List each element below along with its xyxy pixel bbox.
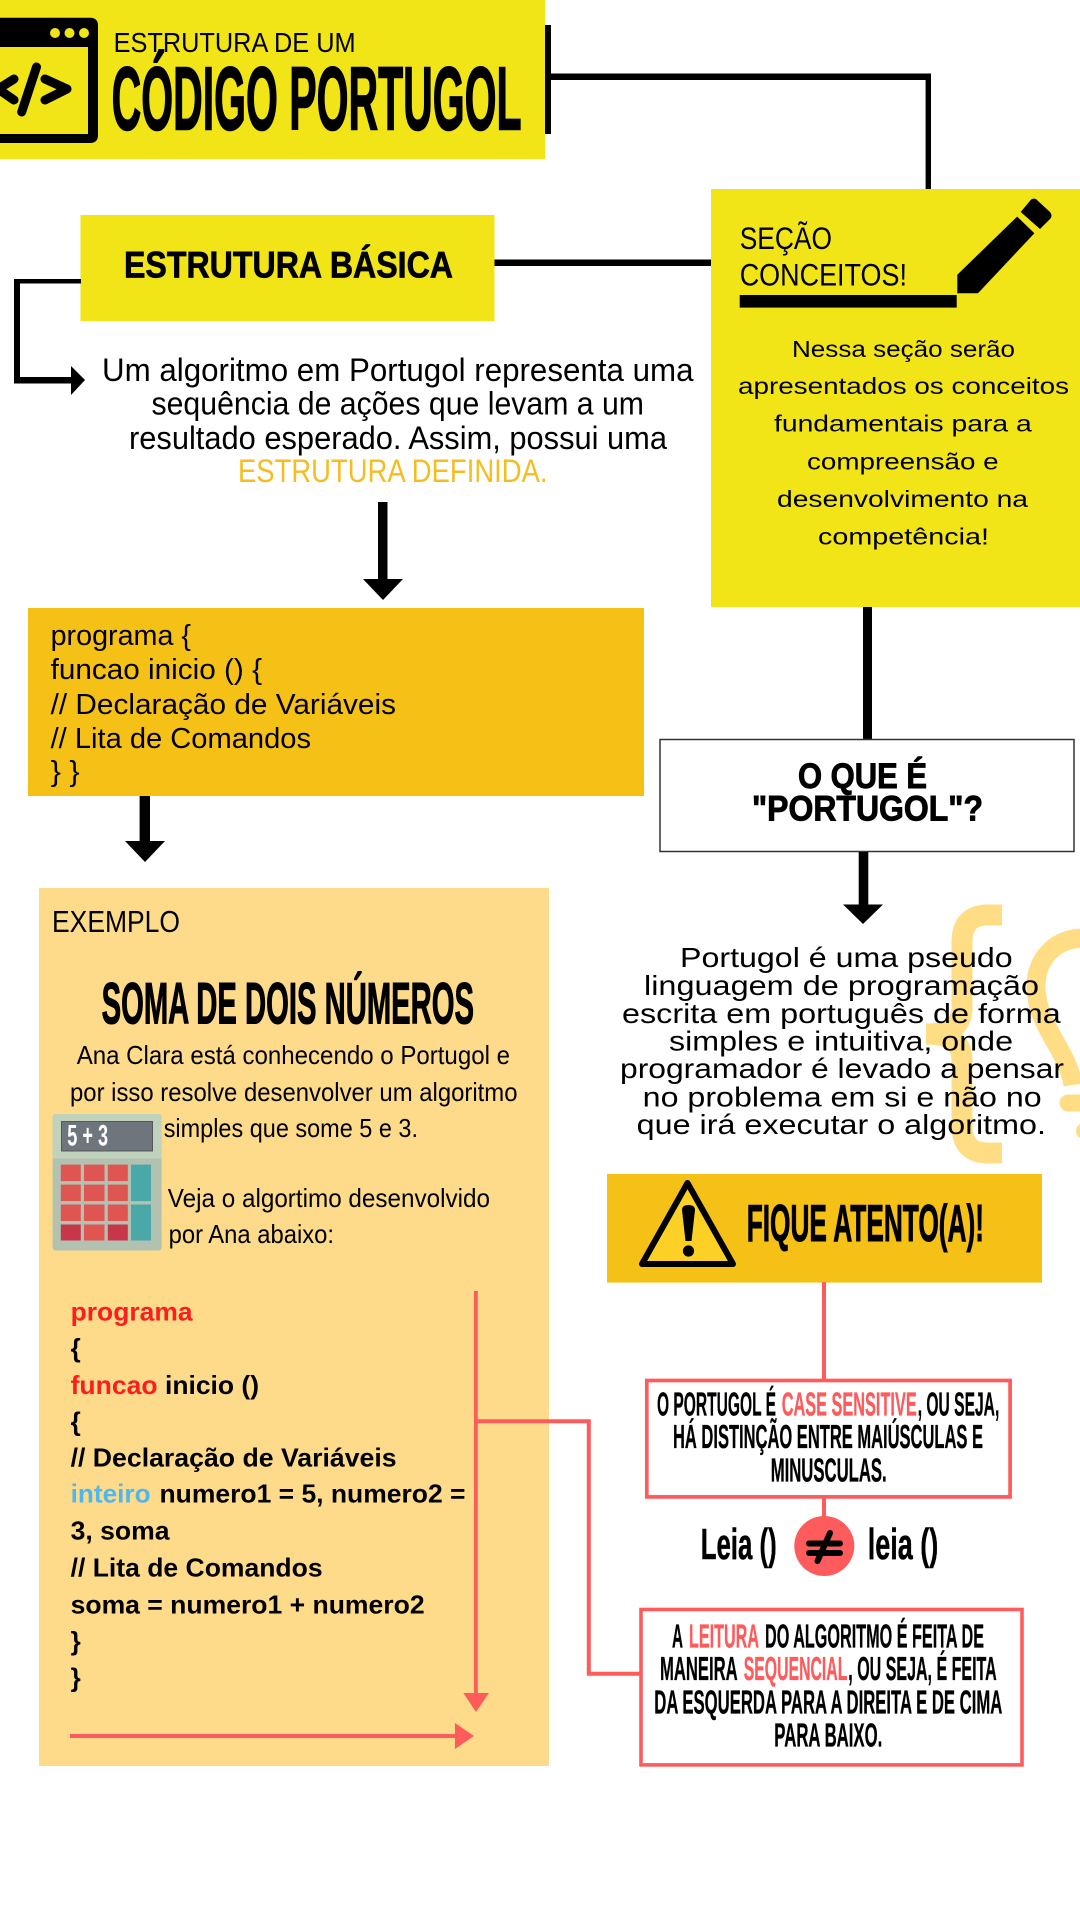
panel: sequential reading note: A: [672, 1617, 683, 1654]
text block: portugol definition: Portugol é uma pseudo: [680, 942, 1013, 973]
text block: portugol definition: que irá executar o algoritmo.: [637, 1109, 1046, 1140]
section text: [738, 336, 1069, 550]
icon: calculator: [53, 1114, 162, 1250]
example intro text: simples que some 5 e 3.: [164, 1113, 418, 1143]
text block: algorithm description: Um algoritmo em Portugol representa uma: [102, 352, 694, 388]
example heading: SOMA DE DOIS NÚMEROS: [102, 972, 474, 1037]
section text: compreensão e: [807, 449, 999, 475]
panel: code skeleton: // Lita de Comandos: [51, 723, 311, 755]
panel: code skeleton: } }: [51, 756, 80, 788]
example intro text: por Ana abaixo:: [169, 1219, 334, 1249]
code listing: inicio (): [165, 1370, 259, 1400]
arrow: description to code skeleton: [363, 502, 403, 600]
connector: concepts section to question box: [863, 607, 872, 740]
panel: sequential reading note: LEITURA: [689, 1617, 759, 1654]
section text: fundamentais para a: [774, 411, 1033, 437]
panel: sequential reading note: [641, 1610, 1022, 1765]
comparison: Leia differs from leia: [701, 1516, 938, 1576]
label: leia: leia (): [868, 1520, 938, 1569]
text block: portugol definition: escrita em português de forma: [622, 998, 1062, 1029]
icon: not equal sign: [794, 1516, 854, 1576]
panel: sequential reading note: PARA BAIXO.: [774, 1717, 882, 1754]
icon: code window: [0, 18, 98, 143]
text block: portugol definition: simples e intuitiva, onde: [669, 1026, 1013, 1057]
panel: seção conceitos: [711, 189, 1080, 607]
panel: code skeleton: programa {: [51, 620, 191, 652]
code listing: {: [71, 1407, 81, 1437]
arrow: code skeleton to example: [125, 796, 165, 862]
text block: algorithm description: [102, 352, 694, 489]
code listing: }: [71, 1626, 81, 1656]
label: Leia: Leia (): [701, 1520, 777, 1569]
arrow: question box to definition: [843, 852, 883, 924]
section text: desenvolvimento na: [777, 486, 1029, 512]
code listing: [71, 1297, 465, 1693]
section text: apresentados os conceitos: [738, 373, 1069, 399]
icon: pencil with underline: [740, 199, 1052, 308]
text block: portugol definition: linguagem de programação: [644, 970, 1039, 1001]
code listing: // Lita de Comandos: [71, 1553, 323, 1583]
panel: estrutura básica heading: ESTRUTURA BÁSICA: [124, 244, 453, 286]
text block: algorithm description: resultado esperado. Assim, possui uma: [129, 420, 667, 456]
example intro text: Ana Clara está conhecendo o Portugol e: [77, 1040, 510, 1070]
panel: fique atento: [607, 1174, 1042, 1283]
panel: seção conceitos: CONCEITOS!: [740, 256, 907, 292]
connector: reading arrow to sequential note: [477, 1421, 643, 1674]
text block: portugol definition: programador é levado a pensar: [620, 1053, 1064, 1084]
panel: code skeleton: // Declaração de Variáveis: [51, 689, 396, 721]
section heading: SEÇÃO: [740, 220, 832, 256]
panel: example: [39, 888, 549, 1766]
code listing: funcao: [71, 1370, 158, 1400]
code listing: programa: [71, 1297, 193, 1327]
section text: Nessa seção serão: [792, 336, 1015, 362]
icon: calculator: 5 + 3: [67, 1120, 108, 1152]
code listing: 3, soma: [71, 1515, 170, 1545]
background icon: braces and light bulb: [926, 915, 1080, 1153]
panel: o que é portugol: O QUE É: [798, 756, 927, 796]
code listing: numero1 = 5, numero2 =: [160, 1479, 466, 1509]
code listing: soma = numero1 + numero2: [71, 1589, 425, 1619]
panel: o que é portugol: "PORTUGOL"?: [752, 790, 983, 829]
arrow: basic structure to description: [14, 279, 85, 395]
text block: portugol definition: [620, 942, 1064, 1140]
panel: o que é portugol: [660, 740, 1074, 852]
icon: warning triangle: [642, 1183, 733, 1264]
code listing: {: [71, 1333, 81, 1363]
section text: competência!: [818, 524, 989, 550]
code listing: }: [71, 1663, 81, 1693]
connector: basic structure to concepts section: [494, 260, 712, 266]
panel: estrutura básica heading: [80, 215, 494, 321]
title line 1: ESTRUTURA DE UM: [114, 27, 356, 58]
connector: header to concepts section: [545, 25, 931, 190]
connector: note to comparison: [822, 1498, 826, 1518]
connector: warning to case sensitive note: [822, 1282, 826, 1380]
arrow: reading direction left to right: [70, 1723, 474, 1749]
text block: algorithm description: sequência de ações que levam a um: [152, 386, 644, 422]
example label: EXEMPLO: [52, 904, 180, 939]
panel: case sensitive note: O PORTUGOL É: [657, 1386, 776, 1423]
example intro text: por isso resolve desenvolver um algoritmo: [70, 1077, 518, 1107]
example intro text: [70, 1040, 518, 1249]
panel: sequential reading note: MANEIRA: [660, 1650, 738, 1687]
panel: case sensitive note: MINUSCULAS.: [771, 1452, 887, 1489]
code listing: inteiro: [71, 1479, 151, 1509]
code listing: // Declaração de Variáveis: [71, 1443, 397, 1473]
example intro text: Veja o algortimo desenvolvido: [168, 1183, 490, 1213]
panel: code skeleton: [28, 608, 644, 796]
infographic canvas: CÓDIGO PORTUGOL: [112, 49, 522, 150]
text block: portugol definition: no problema em si e não no: [643, 1082, 1042, 1112]
panel: case sensitive note: CASE SENSITIVE: [782, 1386, 917, 1423]
panel: sequential reading note: SEQUENCIAL: [744, 1650, 847, 1687]
text block: algorithm description: ESTRUTURA DEFINIDA.: [238, 453, 548, 489]
panel: code skeleton: funcao inicio () {: [51, 654, 262, 686]
arrow: reading direction top to bottom: [463, 1291, 489, 1712]
panel: case sensitive note: [647, 1380, 1010, 1497]
title banner: [0, 0, 545, 159]
